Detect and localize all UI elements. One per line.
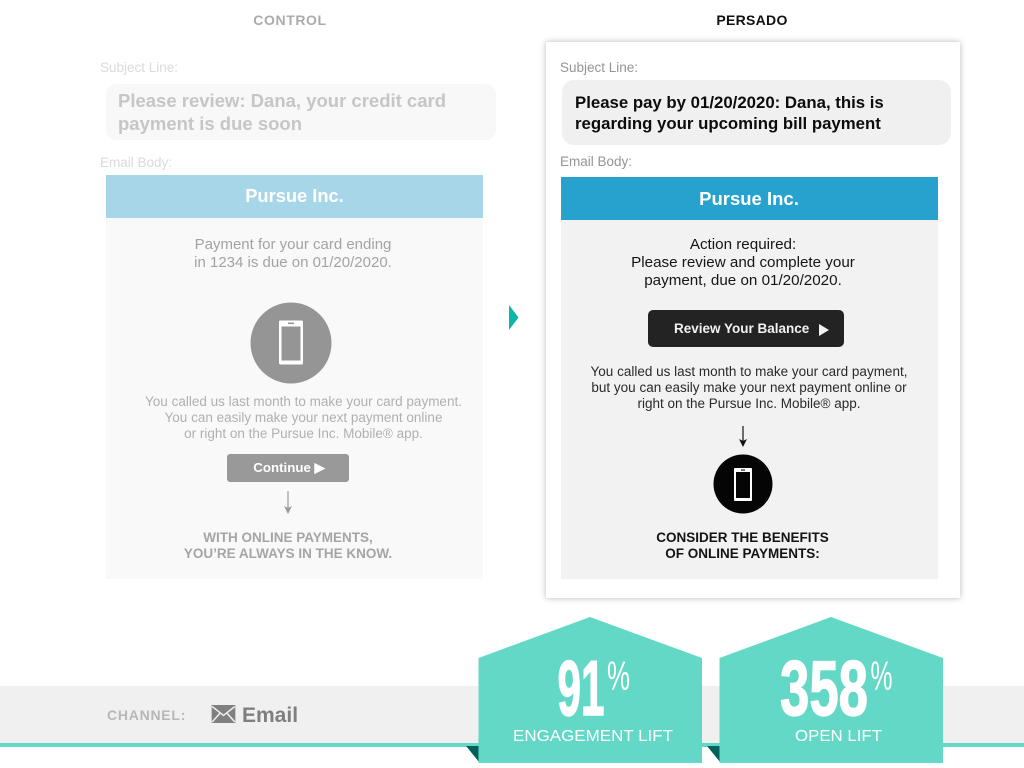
icon: envelope — [212, 705, 236, 723]
arrow: control down — [284, 491, 292, 514]
persado action text: Action required: — [690, 236, 796, 253]
channel label: CHANNEL: — [107, 707, 186, 723]
persado message text — [590, 364, 907, 411]
persado button triangle — [819, 324, 829, 336]
control payment text: Payment for your card ending — [195, 236, 391, 253]
control subject text: Please review: Dana, your credit card — [118, 90, 446, 111]
control message text: or right on the Pursue Inc. Mobile® app. — [184, 426, 423, 441]
persado action text: Please review and complete your — [631, 254, 855, 271]
panel: persado email — [546, 42, 960, 598]
badge: open lift — [707, 617, 943, 763]
engagement value: 91 — [558, 644, 604, 732]
persado subject bubble — [562, 80, 951, 145]
icon: control phone — [250, 302, 332, 384]
persado button label: Review Your Balance — [674, 321, 809, 336]
persado message text: You called us last month to make your card payment, — [591, 364, 907, 379]
control message text — [145, 394, 462, 441]
persado closing text: OF ONLINE PAYMENTS: — [665, 546, 820, 561]
persado subject text: Please pay by 01/20/2020: Dana, this is — [575, 93, 884, 112]
control subject bubble — [106, 84, 496, 140]
persado button — [648, 310, 844, 347]
persado action text: payment, due on 01/20/2020. — [644, 272, 842, 289]
badge shape — [720, 617, 943, 763]
badge fold — [707, 746, 720, 762]
control email body — [106, 175, 483, 579]
channel band — [0, 686, 1024, 747]
control payment text — [194, 236, 392, 270]
control closing text — [184, 530, 392, 561]
badge fold — [466, 746, 479, 762]
open value: 358 — [780, 644, 868, 732]
control closing text: WITH ONLINE PAYMENTS, — [203, 530, 373, 545]
persado message text: but you can easily make your next payment online or — [591, 380, 907, 395]
arrow: persado down — [739, 426, 747, 447]
badge shape — [478, 617, 702, 763]
open percent: % — [870, 653, 892, 699]
icon: persado phone — [714, 454, 772, 514]
heading: persado: PERSADO — [716, 12, 788, 28]
control subject label: Subject Line: — [100, 60, 178, 75]
persado closing text — [656, 530, 829, 561]
control message text: You can easily make your next payment online — [165, 410, 442, 425]
engagement percent: % — [607, 653, 630, 699]
engagement label: ENGAGEMENT LIFT — [513, 728, 674, 745]
control brand name: Pursue Inc. — [245, 185, 344, 206]
heading: control: CONTROL — [253, 12, 327, 28]
persado body label: Email Body: — [560, 154, 632, 169]
arrow: control to persado — [509, 305, 518, 330]
control email header — [106, 175, 483, 218]
control body label: Email Body: — [100, 155, 172, 170]
persado message text: right on the Pursue Inc. Mobile® app. — [637, 396, 861, 411]
persado action text — [631, 236, 855, 289]
control message text: You called us last month to make your card payment. — [145, 394, 462, 409]
panel: control email — [100, 60, 483, 561]
persado closing text: CONSIDER THE BENEFITS — [656, 530, 829, 545]
channel value: Email — [242, 704, 298, 727]
control button — [227, 454, 349, 482]
control subject text — [118, 90, 446, 134]
persado brand name: Pursue Inc. — [699, 188, 799, 209]
persado subject label: Subject Line: — [560, 60, 638, 75]
persado email body — [561, 177, 938, 579]
open label: OPEN LIFT — [795, 728, 883, 745]
control payment text: in 1234 is due on 01/20/2020. — [194, 254, 392, 270]
control closing text: YOU’RE ALWAYS IN THE KNOW. — [184, 546, 392, 561]
control subject text: payment is due soon — [118, 112, 302, 134]
persado subject text — [575, 93, 884, 133]
persado subject text: regarding your upcoming bill payment — [575, 114, 881, 133]
badge: engagement lift — [466, 617, 702, 763]
control button label: Continue ▶ — [253, 460, 325, 475]
persado email header — [561, 177, 938, 220]
